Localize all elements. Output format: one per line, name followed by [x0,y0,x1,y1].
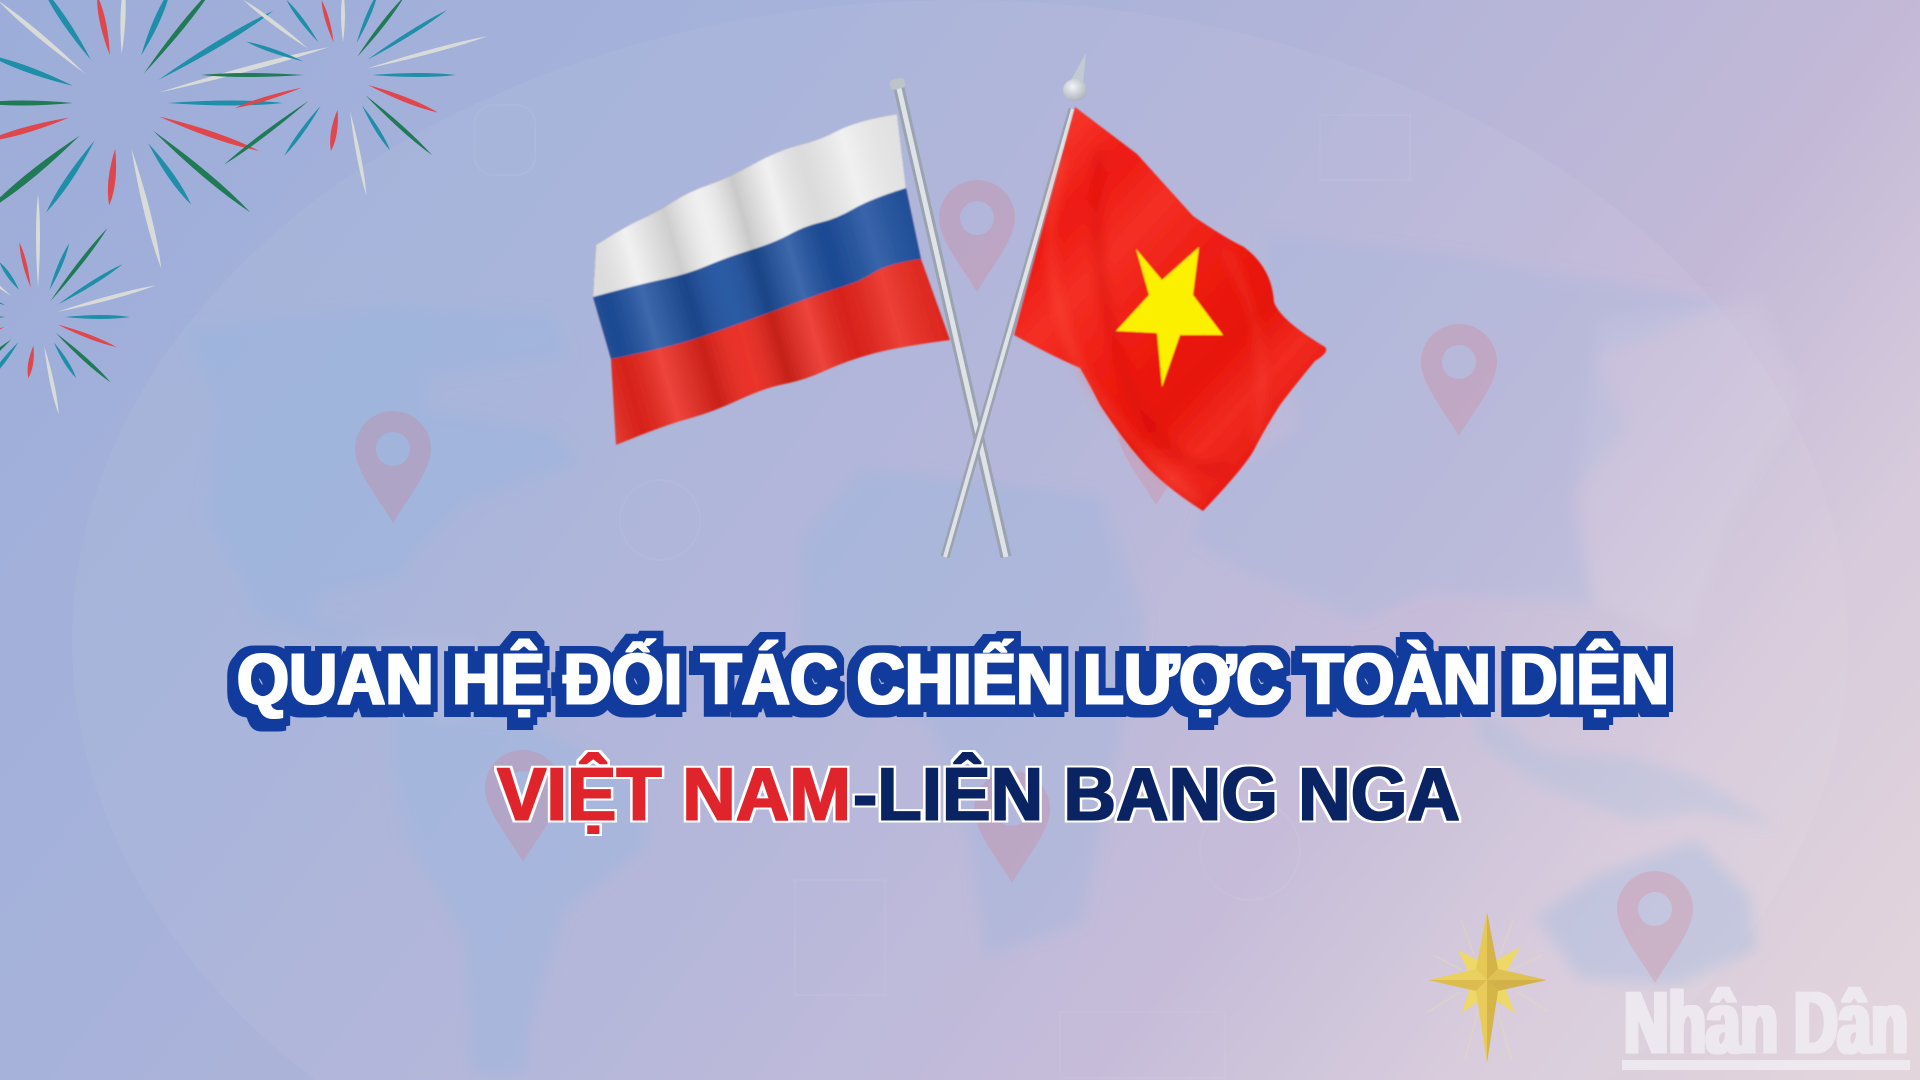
star rays [1428,920,1548,1060]
title line 2 [497,752,1460,836]
title line 1: QUAN HỆ ĐỐI TÁC CHIẾN LƯỢC TOÀN DIỆN [237,638,1669,720]
location pins [355,180,1693,983]
title line 2: -LIÊN BANG NGA [853,752,1460,836]
pole: Vietnam [945,53,1087,557]
flag: Vietnam [1014,107,1326,511]
star [1116,247,1223,387]
title line 2: VIỆT NAM [497,752,851,836]
pole: Russia [889,77,1006,557]
firework: left lower [0,194,156,415]
pole finial [1063,53,1087,101]
faint icons [475,105,1410,1078]
watermark: Nhân Dân: Nhân [1624,973,1778,1072]
crossed flags [560,53,1326,557]
gold star [1428,912,1548,1063]
firework: large top-left [0,0,329,270]
title [237,638,1669,836]
continents [184,234,1800,1075]
firework: top middle [201,0,488,196]
flag: Russia [592,114,950,446]
